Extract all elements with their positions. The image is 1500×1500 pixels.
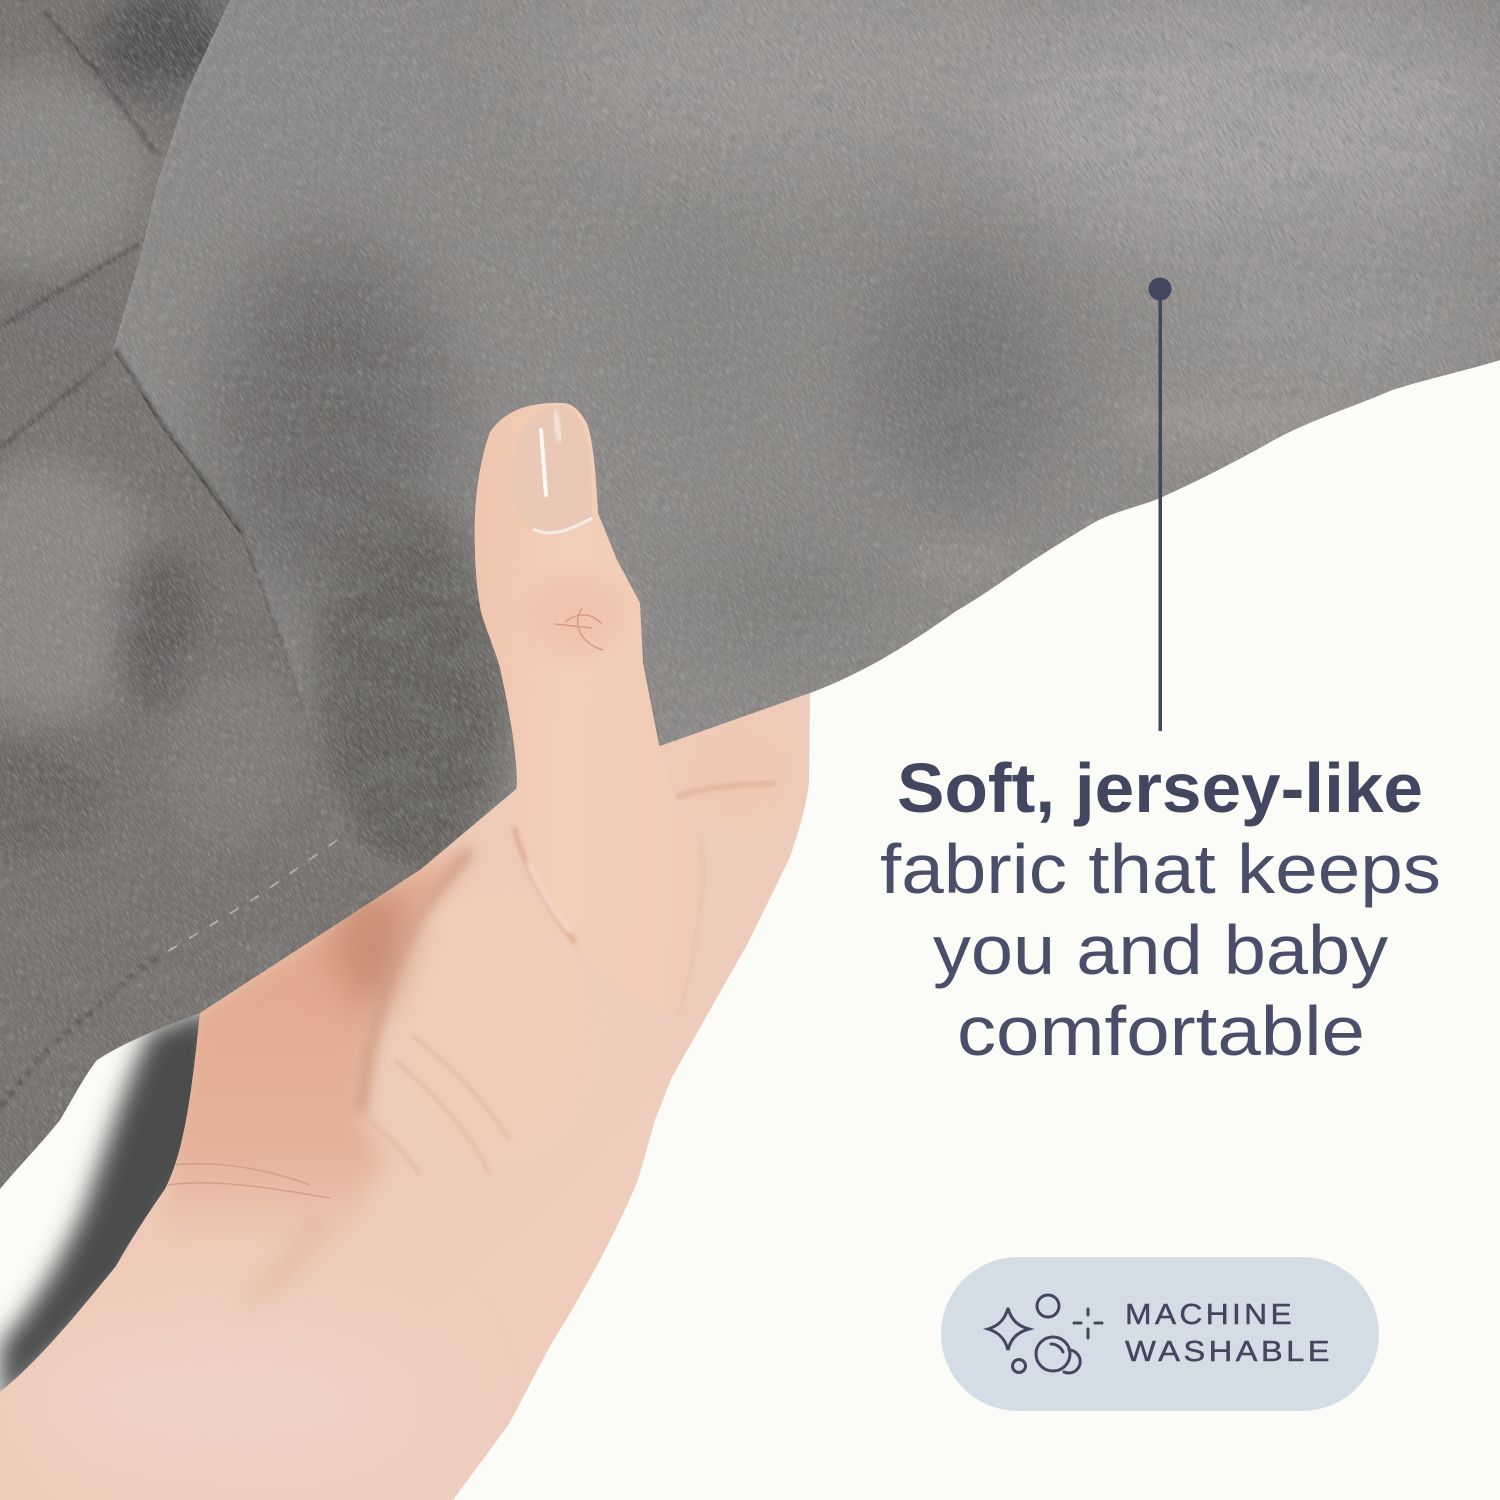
badge label <box>1125 1299 1333 1368</box>
thenar highlight <box>397 927 424 987</box>
shadow between thumb and fingers <box>676 840 700 1013</box>
thumbnail <box>512 405 592 533</box>
badge label: MACHINE <box>1125 1299 1295 1331</box>
icon: sparkles and bubbles <box>988 1295 1102 1373</box>
wrist blotches <box>249 1223 322 1300</box>
callout text: you and baby <box>933 911 1388 989</box>
fabric: woven texture <box>0 0 1500 1188</box>
thumb <box>475 403 700 1013</box>
stitching along hem <box>157 840 337 958</box>
callout leader line with dot <box>1148 278 1172 731</box>
badge: machine washable <box>941 1257 1379 1411</box>
fabric: quilted blanket underlayer <box>0 0 1500 1189</box>
hand <box>0 403 810 1500</box>
cast shadow under fabric <box>0 1005 220 1410</box>
quilt seam lines <box>0 11 157 448</box>
fabric: main flap <box>113 0 1500 870</box>
badge label: WASHABLE <box>1125 1336 1333 1368</box>
palm shading <box>162 848 458 1226</box>
callout text <box>880 749 1441 1070</box>
callout text: fabric that keeps <box>880 830 1441 908</box>
wrinkles on thenar <box>360 1035 510 1175</box>
fingers behind <box>700 716 761 780</box>
callout text: Soft, jersey-like <box>897 749 1423 827</box>
callout text: comfortable <box>957 992 1365 1070</box>
